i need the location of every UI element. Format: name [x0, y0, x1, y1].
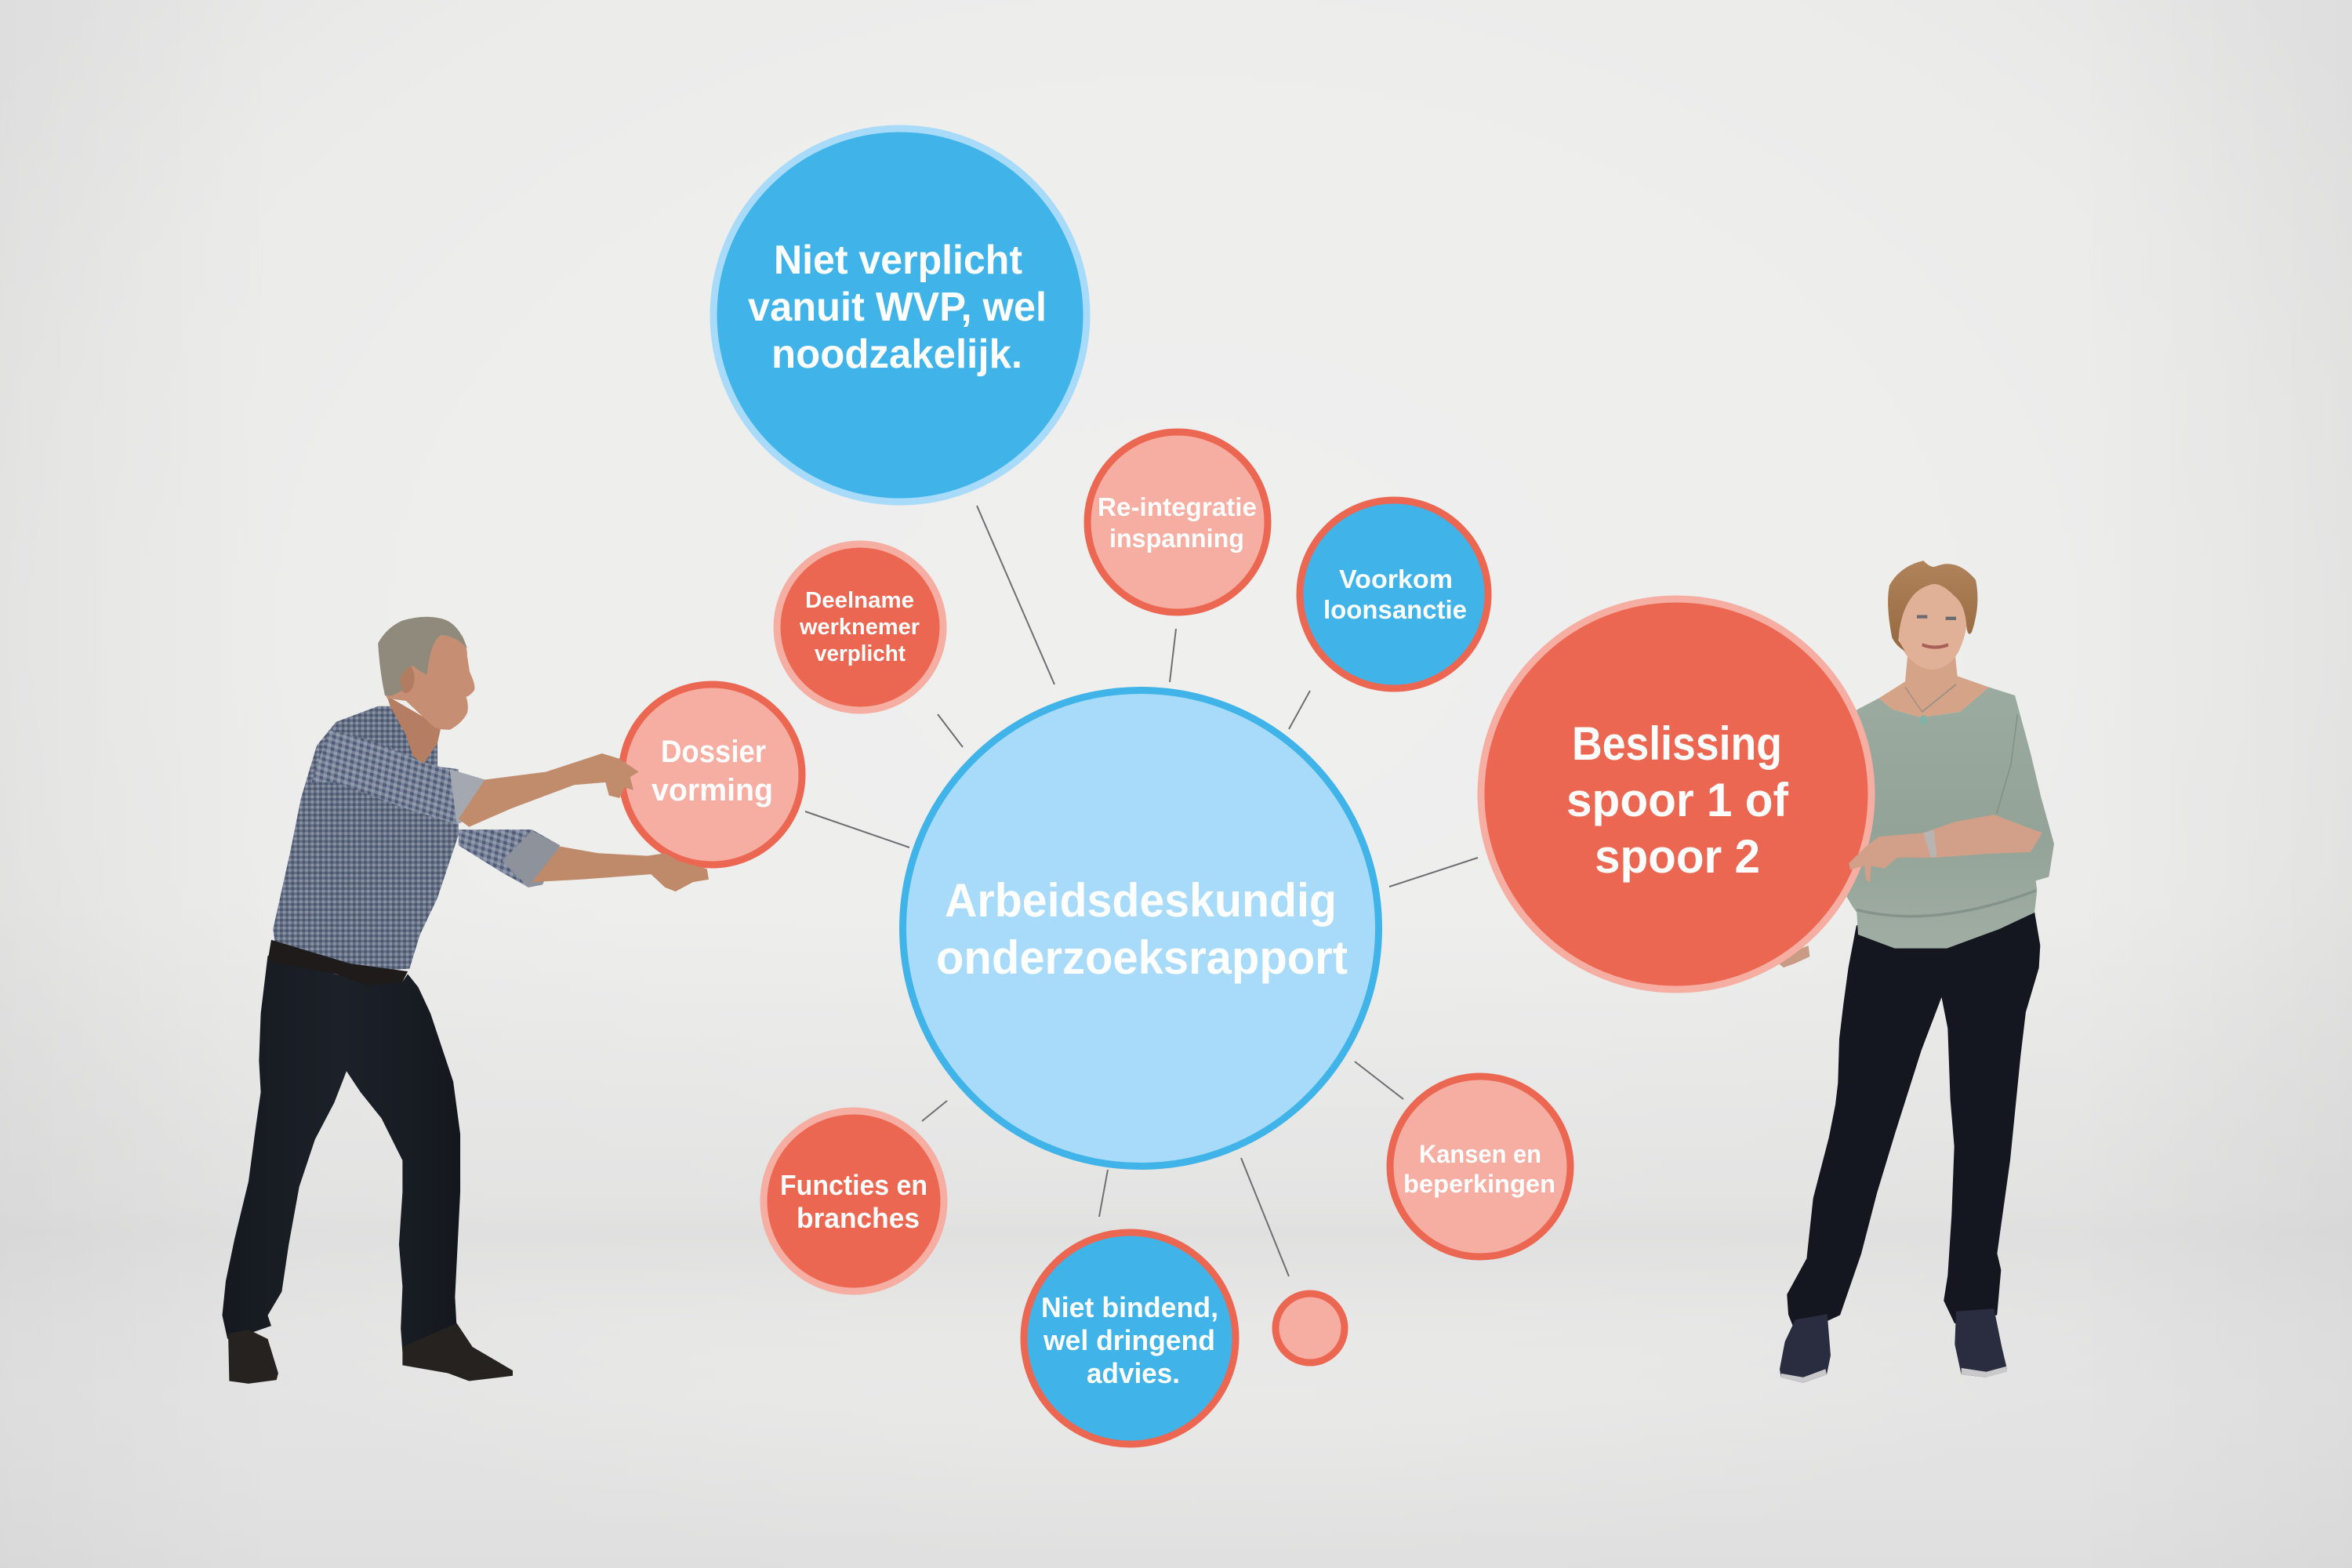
- woman forearm and hand: [1849, 815, 2042, 882]
- circle: Niet bindend, wel dringend advies.: wel dringend: [1043, 1324, 1215, 1356]
- woman hair: [1888, 561, 1977, 652]
- circle: Deelname werknemer verplicht: [777, 544, 943, 710]
- circle: Kansen en beperkingen: beperkingen: [1403, 1170, 1555, 1198]
- circle: Dossier vorming: [622, 684, 802, 865]
- circle: Dossier vorming: vorming: [652, 773, 773, 808]
- man trousers: [222, 956, 460, 1352]
- circle: Beslissing spoor 1 of spoor 2: spoor 2: [1595, 830, 1760, 883]
- circle: Beslissing spoor 1 of spoor 2: spoor 1 of: [1566, 774, 1789, 826]
- circle: Voorkom loonsanctie: loonsanctie: [1323, 595, 1467, 624]
- woman trousers: [1788, 907, 2040, 1330]
- man hair: [378, 617, 467, 695]
- circle: small empty: [1276, 1294, 1345, 1363]
- circle: Deelname werknemer verplicht: verplicht: [815, 641, 906, 666]
- circle: Niet bindend, wel dringend advies.: [1024, 1232, 1236, 1444]
- circle: Beslissing spoor 1 of spoor 2: Beslissing: [1572, 717, 1782, 770]
- person: woman body: [1778, 561, 2054, 1383]
- circle: Voorkom loonsanctie: Voorkom: [1339, 564, 1453, 593]
- circle: Niet bindend, wel dringend advies.: Niet bindend,: [1041, 1291, 1218, 1323]
- man belt: [268, 940, 408, 985]
- man shirt: [273, 706, 459, 970]
- circle: Functies en branches: Functies en: [780, 1169, 927, 1201]
- woman top: [1840, 687, 2054, 949]
- connector lines: [805, 506, 1478, 1276]
- man far arm and hand: [532, 847, 709, 891]
- circle: Kansen en beperkingen: [1390, 1076, 1570, 1257]
- woman neck and chest: [1879, 652, 1989, 717]
- circle: Beslissing spoor 1 of spoor 2: [1481, 599, 1871, 989]
- circle: Niet verplicht: vanuit WVP, wel: [748, 285, 1047, 330]
- circle: Deelname werknemer verplicht: Deelname: [805, 588, 914, 613]
- man neck: [387, 695, 441, 764]
- central circle: Arbeidsdeskundig onderzoeksrapport: [903, 690, 1378, 1167]
- man shoes: [228, 1323, 513, 1384]
- man near sleeve: [311, 730, 485, 824]
- circle: Functies en branches: [764, 1111, 944, 1291]
- circle: Niet verplicht: [713, 129, 1087, 502]
- circle: Deelname werknemer verplicht: werknemer: [799, 615, 920, 640]
- circle: Dossier vorming: Dossier: [661, 735, 766, 769]
- woman shoes: [1780, 1308, 2007, 1383]
- circle: Kansen en beperkingen: Kansen en: [1419, 1140, 1541, 1168]
- man head: [379, 635, 474, 730]
- circle: Functies en branches: branches: [797, 1202, 920, 1234]
- circle: Re-integratie inspanning: [1087, 432, 1268, 612]
- circle: Niet bindend, wel dringend advies.: advies.: [1087, 1357, 1180, 1389]
- circle: Niet verplicht: noodzakelijk.: [771, 332, 1022, 377]
- circle: Re-integratie inspanning: Re-integratie: [1098, 492, 1257, 521]
- woman face: [1896, 583, 1968, 670]
- woman hand behind circle: [1778, 946, 1809, 967]
- person: man: [222, 617, 709, 1384]
- central circle: Arbeidsdeskundig onderzoeksrapport: onderzoeksrapport: [936, 931, 1348, 984]
- woman bracelet: [1923, 830, 1937, 858]
- circle: Voorkom loonsanctie: [1300, 500, 1488, 688]
- man far sleeve: [459, 829, 560, 887]
- circle: Re-integratie inspanning: inspanning: [1109, 524, 1244, 553]
- central circle: Arbeidsdeskundig onderzoeksrapport: Arbeidsdeskundig: [945, 874, 1337, 927]
- man near arm and hand: [459, 753, 639, 827]
- circle: Niet verplicht: Niet verplicht: [774, 238, 1022, 283]
